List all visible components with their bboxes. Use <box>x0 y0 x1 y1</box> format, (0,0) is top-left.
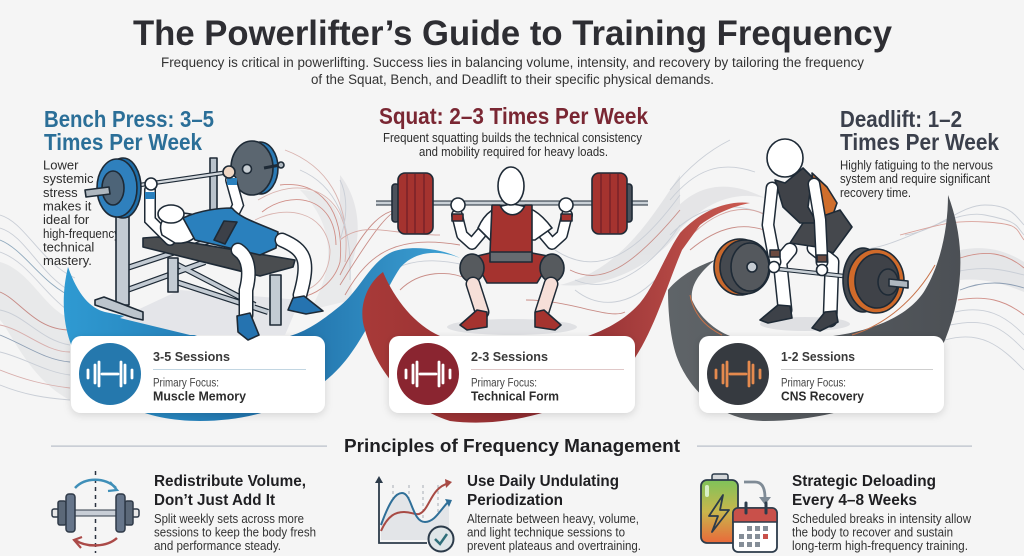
bench press description: mastery. <box>43 253 92 268</box>
principle body: Split weekly sets across more <box>154 512 304 526</box>
session stats: squat: 2-3 Sessions <box>471 350 548 364</box>
heading: deadlift <box>840 106 999 155</box>
panel: deadlift <box>668 106 999 421</box>
bench press description: high-frequency <box>43 226 120 241</box>
session stats: deadlift: Primary Focus: <box>781 378 846 390</box>
bench press description: makes it <box>43 198 92 214</box>
bench press description: ideal for <box>43 212 90 227</box>
icon: blue dumbbell <box>79 343 141 405</box>
principle body: prevent plateaus and overtraining. <box>467 539 641 553</box>
icon: battery and calendar <box>701 474 777 552</box>
session stats: deadlift: 1-2 Sessions <box>781 350 855 364</box>
session stats: squat: Primary Focus: <box>471 378 537 390</box>
heading: bench press <box>44 106 214 155</box>
icon: orange dumbbell <box>707 343 769 405</box>
deadlift description <box>840 158 993 200</box>
principle body: sessions to keep the body fresh <box>154 526 316 540</box>
panel: bench press <box>43 106 460 421</box>
icon: line chart with check <box>375 476 454 552</box>
subtitle: Frequency is critical in powerlifting. Success lies in balancing volume, intensity, and recovery by tailoring the frequency <box>161 55 864 70</box>
principle: redistribute volume <box>52 471 316 553</box>
session stats: deadlift: CNS Recovery <box>781 388 865 404</box>
heading: squat: Squat: 2–3 Times Per Week <box>379 103 648 129</box>
heading: bench press: Bench Press: 3–5 <box>44 106 214 132</box>
principle: strategic deloading <box>701 473 972 553</box>
principle heading: Periodization <box>467 492 563 509</box>
principle heading: Don’t Just Add It <box>154 492 276 509</box>
illustration: squat lifter <box>376 167 648 335</box>
principle heading: Strategic Deloading <box>792 473 936 490</box>
summary card: squat <box>389 336 635 413</box>
principle heading: Every 4–8 Weeks <box>792 492 917 509</box>
session stats: deadlift <box>781 350 933 404</box>
panel: squat <box>362 103 750 423</box>
principle body: and performance steady. <box>154 539 281 553</box>
session stats: bench press: Muscle Memory <box>153 388 247 404</box>
principle heading: Use Daily Undulating <box>467 473 619 490</box>
session stats: bench press: Primary Focus: <box>153 378 219 390</box>
bench press description: Lower <box>43 158 79 172</box>
principle heading <box>467 473 619 509</box>
deadlift description: recovery time. <box>840 185 911 200</box>
principle body <box>792 512 972 553</box>
session stats: bench press: 3-5 Sessions <box>153 350 230 364</box>
principle body: the body to recover and sustain <box>792 526 953 540</box>
gray ribbon <box>668 195 960 421</box>
blue ribbon <box>64 248 460 421</box>
principle: daily undulating periodization <box>375 473 641 553</box>
principle body: Alternate between heavy, volume, <box>467 512 639 526</box>
heading: deadlift: Deadlift: 1–2 <box>840 106 962 132</box>
principle body: long-term high-frequency training. <box>792 539 968 553</box>
squat description <box>383 130 642 159</box>
icon: red dumbbell <box>397 343 459 405</box>
bench press description: systemic <box>43 171 94 186</box>
title: The Powerlifter’s Guide to Training Frequency <box>133 14 893 53</box>
session stats: squat <box>471 350 624 404</box>
deadlift description: system and require significant <box>840 171 990 186</box>
heading: deadlift: Times Per Week <box>840 129 999 155</box>
illustration: deadlift lifter <box>714 139 908 331</box>
red ribbon <box>362 203 750 423</box>
bench press description: technical <box>43 240 94 254</box>
bench press description: stress <box>43 185 78 200</box>
heading: bench press: Times Per Week <box>44 129 202 155</box>
summary card: deadlift <box>699 336 944 413</box>
section heading: principles: Principles of Frequency Management <box>344 436 680 456</box>
principle body: Scheduled breaks in intensity allow <box>792 512 972 526</box>
principle body <box>154 512 316 553</box>
bench press description <box>43 158 120 268</box>
summary card: bench press <box>71 336 325 413</box>
principle heading <box>154 473 306 509</box>
principle heading <box>792 473 936 509</box>
illustration: bench press lifter <box>85 141 323 340</box>
principle body <box>467 512 641 553</box>
subtitle: of the Squat, Bench, and Deadlift to their specific physical demands. <box>311 72 714 87</box>
deadlift description: Highly fatiguing to the nervous <box>840 158 993 172</box>
session stats: bench press <box>153 350 306 404</box>
squat description: Frequent squatting builds the technical consistency <box>383 130 642 145</box>
subtitle <box>161 55 864 87</box>
principle body: and light technique sessions to <box>467 526 625 540</box>
principle heading: Redistribute Volume, <box>154 473 306 490</box>
icon: dumbbell with rotation arrows <box>52 471 139 553</box>
session stats: squat: Technical Form <box>471 388 559 404</box>
squat description: and mobility required for heavy loads. <box>419 144 608 159</box>
